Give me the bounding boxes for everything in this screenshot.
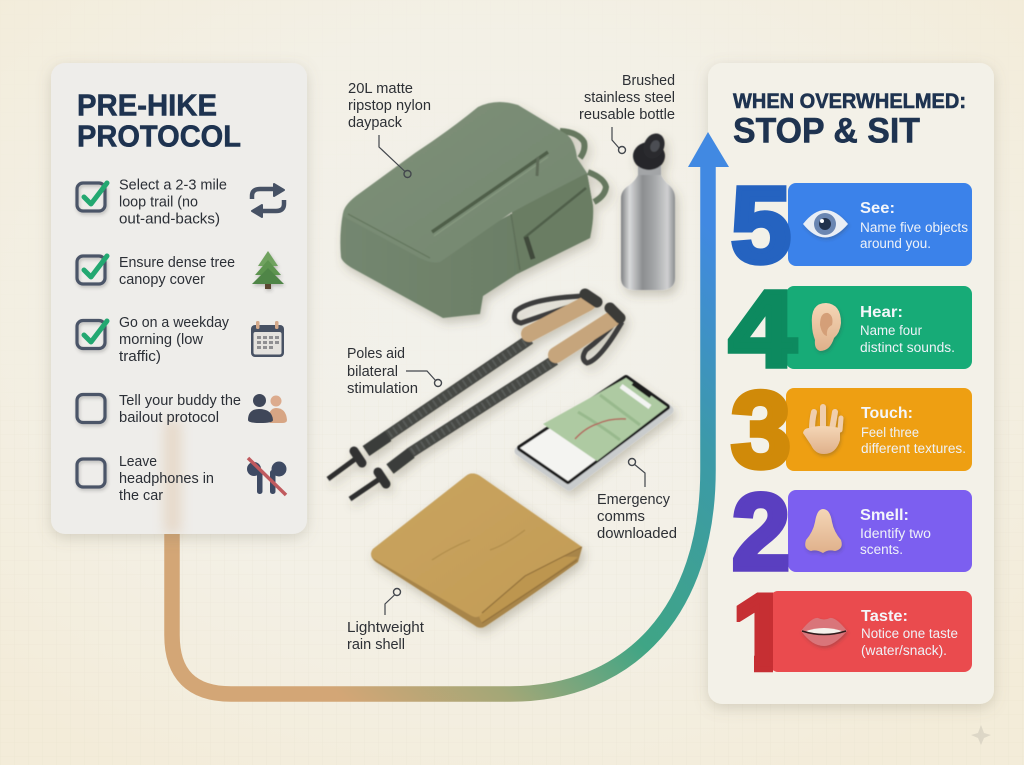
- side shading: [512, 173, 593, 274]
- callout: daypack: 20L matte: [348, 81, 413, 97]
- map: [543, 378, 667, 461]
- callout: daypack: daypack: [348, 115, 403, 131]
- panel heading: PRE-HIKE: [77, 88, 217, 122]
- icon: two people: [248, 394, 287, 423]
- water bottle: [621, 130, 675, 290]
- step 4: hear: Hear:: [860, 304, 903, 321]
- checklist item 2: [77, 251, 284, 289]
- icon: calendar: [251, 321, 284, 357]
- step 1: taste: Taste:: [861, 608, 908, 625]
- checklist item 1: out-and-backs): [119, 212, 220, 228]
- icon: eye: [803, 210, 848, 238]
- trekking poles: [328, 294, 622, 499]
- checklist item 4: [77, 393, 287, 426]
- step 1: taste: (water/snack).: [861, 643, 947, 658]
- icon: hand: [803, 407, 841, 454]
- callout: emergency comms: downloaded: [597, 526, 677, 542]
- step 5: see: Name five objects: [860, 220, 968, 235]
- step 5: see: [731, 164, 972, 285]
- right panel heading: STOP & SIT: [733, 112, 920, 150]
- checklist item 5: [77, 454, 286, 504]
- panel heading: [77, 88, 241, 154]
- step 2: smell: scents.: [860, 542, 903, 557]
- callout: daypack: [348, 81, 431, 178]
- step 3: touch: different textures.: [861, 441, 966, 456]
- checklist item 3: traffic): [119, 349, 161, 365]
- phone with trail map: [519, 378, 669, 486]
- checklist item 4: bailout protocol: [119, 410, 219, 426]
- callout: emergency comms: [597, 458, 677, 542]
- callout: emergency comms: comms: [597, 509, 645, 525]
- left panel: pre-hike protocol: [51, 63, 307, 534]
- number 5: 5: [731, 164, 791, 285]
- strap loops: [560, 131, 606, 202]
- checklist item 3: morning (low: [119, 332, 204, 348]
- checklist item 1: [77, 178, 284, 228]
- step 4: hear: Name four: [860, 323, 922, 338]
- zippers and seams: [348, 152, 586, 270]
- callout: rain shell: [347, 588, 424, 653]
- step 5: see: See:: [860, 200, 895, 217]
- pole 1: [328, 294, 597, 479]
- step 1: taste: [736, 591, 972, 672]
- checklist item 2: Ensure dense tree: [119, 255, 235, 271]
- number 2: 2: [732, 471, 790, 592]
- trail arrow from pre-hike to stop and sit: [172, 132, 729, 694]
- callout: emergency comms: Emergency: [597, 492, 671, 508]
- callout: poles: [347, 346, 442, 397]
- step 4: hear: distinct sounds.: [860, 340, 955, 355]
- checklist item 1: Select a 2-3 mile: [119, 178, 227, 194]
- icon: loop arrows: [252, 184, 284, 217]
- front panel: [340, 173, 593, 318]
- bottle cap: [633, 130, 669, 170]
- number 4: 4: [729, 268, 796, 389]
- icon: mouth: [801, 618, 847, 646]
- step 4: hear: [729, 268, 972, 389]
- checklist item 5: Leave: [119, 454, 157, 470]
- icon: crossed-out earbuds: [247, 458, 286, 495]
- watermark sparkle: [971, 725, 991, 745]
- icon: pine tree: [252, 251, 284, 289]
- step 5: see: around you.: [860, 236, 931, 251]
- pole 2: [350, 308, 622, 499]
- number 1: 1: [732, 572, 792, 692]
- callout: poles: Poles aid: [347, 346, 405, 362]
- right panel heading: WHEN OVERWHELMED:: [733, 89, 966, 113]
- backpack: [340, 102, 606, 318]
- step 2: smell: Identify two: [860, 526, 931, 541]
- step 3: touch: Touch:: [861, 405, 913, 422]
- checklist item 2: canopy cover: [119, 272, 205, 288]
- panel heading: PROTOCOL: [77, 118, 241, 154]
- checklist item 3: Go on a weekday: [119, 315, 230, 331]
- top panel: [343, 102, 587, 262]
- callout: bottle: [579, 73, 675, 154]
- checklist item 4: Tell your buddy the: [119, 393, 241, 409]
- callout: bottle: Brushed: [622, 73, 675, 89]
- callout: poles: bilateral: [347, 364, 398, 380]
- callout: rain shell: Lightweight: [347, 620, 424, 636]
- step 2: smell: Smell:: [860, 507, 909, 524]
- step 3: touch: [731, 369, 972, 490]
- checklist item 5: headphones in: [119, 471, 214, 487]
- step 1: taste: Notice one taste: [861, 626, 958, 641]
- step 3: touch: Feel three: [861, 425, 919, 440]
- checklist item 3: [77, 315, 284, 365]
- step 2: smell: [732, 471, 972, 592]
- rain shell: [371, 474, 582, 628]
- callout: bottle: reusable bottle: [579, 107, 675, 123]
- callout: bottle: stainless steel: [584, 90, 675, 106]
- number 3: 3: [731, 369, 791, 490]
- right panel heading: [733, 89, 966, 150]
- checklist item 1: loop trail (no: [119, 194, 198, 210]
- icon: ear: [812, 303, 841, 351]
- callout: rain shell: rain shell: [347, 637, 405, 653]
- callout: poles: stimulation: [347, 381, 418, 397]
- callout: daypack: ripstop nylon: [348, 98, 431, 114]
- checklist item 5: the car: [119, 488, 163, 504]
- right panel: when overwhelmed: [708, 63, 994, 704]
- icon: nose: [805, 509, 842, 553]
